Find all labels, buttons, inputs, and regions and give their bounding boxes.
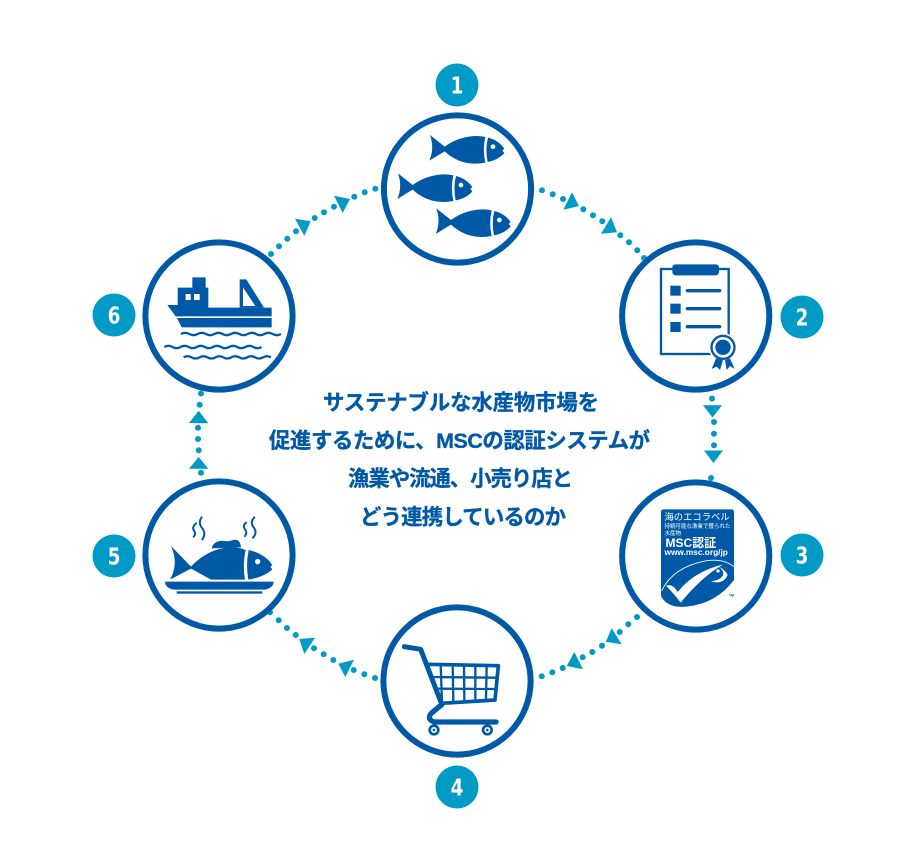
central text: サステナブルな水産物市場を [323, 390, 599, 415]
circle 1 [384, 115, 531, 263]
step 2: certification [622, 242, 769, 390]
arrow: 2 to 3 [703, 396, 723, 481]
badge 2 [780, 296, 824, 338]
icon: MSC ecolabel: www.msc.org/jp [664, 547, 728, 557]
arrow: 3 to 4 [539, 614, 640, 679]
arrow: 4 to 5 [267, 609, 378, 681]
icon: MSC ecolabel: MSC認証 [666, 536, 716, 550]
circle 2 [622, 242, 769, 390]
badge 1 [436, 64, 478, 106]
circle 4 [383, 607, 531, 755]
circle 5 [145, 481, 293, 629]
icon: MSC ecolabel: 海のエコラベル [664, 511, 730, 522]
badge 5 [92, 534, 136, 578]
icon: clipboard with seal [661, 264, 737, 370]
icon: fish on a plate with steam [165, 517, 274, 594]
central text: 促進するために、MSCの認証システムが [269, 428, 650, 453]
icon: three fish [397, 135, 511, 237]
icon: MSC ecolabel: 水産物 [664, 529, 682, 537]
step 6: fishing vessel [145, 242, 293, 390]
arrow: 5 to 6 [189, 390, 208, 476]
badge 4: 4 [451, 775, 463, 801]
badge 6 [92, 294, 136, 336]
icon: MSC ecolabel: 持続可能な漁業で獲られた [664, 522, 731, 530]
badge 3 [780, 534, 824, 576]
arrow: 6 to 1 [268, 186, 378, 257]
icon: ship on waves [164, 277, 281, 358]
step 4: retail [383, 607, 531, 755]
icon: shopping cart [404, 647, 498, 734]
step 5: consumers [145, 481, 293, 629]
icon: MSC ecolabel: TM [729, 594, 734, 598]
badge 4 [436, 766, 478, 808]
central text: 漁業や流通、小売り店と [348, 467, 573, 491]
badge 2: 2 [796, 305, 808, 331]
step 3: MSC label [622, 482, 769, 630]
arrow: 1 to 2 [539, 187, 647, 261]
circle 3 [622, 482, 769, 630]
badge 3: 3 [796, 543, 808, 569]
icon: MSC ecolabel [661, 509, 734, 607]
step 1: fish stocks [384, 115, 531, 263]
central text [269, 390, 650, 530]
badge 1: 1 [451, 73, 463, 99]
badge 5: 5 [108, 544, 120, 570]
badge 6: 6 [108, 303, 120, 329]
circle 6 [145, 242, 293, 390]
central text: どう連携しているのか [360, 506, 566, 530]
